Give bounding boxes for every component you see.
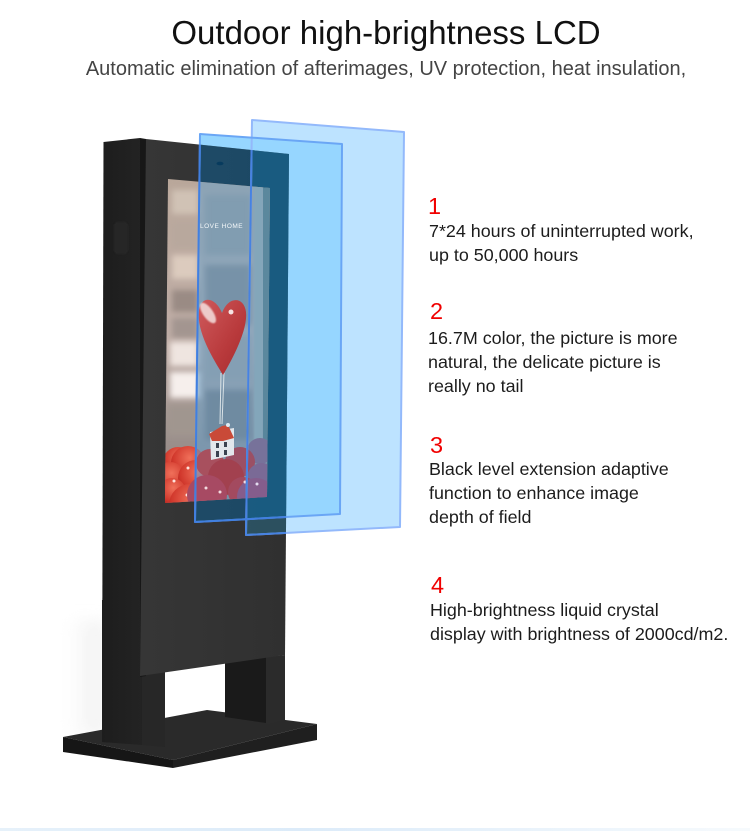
feature 2: really no tail	[428, 376, 523, 396]
feature 1: 7*24 hours of uninterrupted work,	[429, 221, 694, 241]
camera hole	[216, 162, 224, 165]
feature 2: natural, the delicate picture is	[428, 352, 661, 372]
rear blue film panel, over white	[246, 120, 404, 535]
feature 3: function to enhance image	[429, 483, 639, 503]
slogan: LOVE HOME	[200, 223, 243, 230]
feature 4: 4	[431, 572, 444, 598]
film tint over screen	[196, 182, 270, 502]
right edge of screen through films	[263, 188, 270, 440]
feature 3: Black level extension adaptive	[429, 459, 669, 479]
heart highlights	[199, 302, 217, 324]
screen image	[165, 179, 270, 503]
feature 3: depth of field	[429, 507, 531, 527]
outdoor LCD kiosk	[63, 138, 317, 768]
balloon strings	[220, 373, 224, 424]
rear film outline	[246, 120, 404, 535]
feature 3	[429, 432, 669, 527]
feature 1	[428, 193, 694, 265]
feature 3: 3	[430, 432, 443, 458]
tinted balloons	[187, 438, 268, 502]
blurred brick wall	[168, 190, 251, 440]
wall shadow	[66, 620, 104, 735]
front film tint	[196, 144, 289, 521]
right leg	[225, 655, 285, 725]
bottom strip	[0, 828, 750, 831]
feature 4	[430, 572, 728, 644]
feature 1: 1	[428, 193, 441, 219]
film outlines where they cross the kiosk	[194, 144, 286, 536]
grey pillar	[254, 185, 263, 455]
subtitle: Automatic elimination of afterimages, UV protection, heat insulation,	[86, 58, 686, 80]
front blue film panel, over white	[195, 134, 342, 522]
red balloons, left	[165, 446, 210, 503]
rear film tint	[247, 150, 289, 534]
feature 4: High-brightness liquid crystal	[430, 600, 659, 620]
side wall	[102, 138, 142, 745]
heart balloon	[199, 300, 246, 375]
front film outline	[195, 134, 342, 522]
front panel	[140, 139, 289, 676]
left leg	[102, 600, 165, 747]
house	[209, 423, 234, 460]
corner strip	[140, 138, 146, 677]
feature 2: 16.7M color, the picture is more	[428, 328, 678, 348]
base plate	[63, 710, 317, 768]
feature 2: 2	[430, 298, 443, 324]
title: Outdoor high-brightness LCD	[171, 14, 601, 51]
feature 1: up to 50,000 hours	[429, 245, 578, 265]
feature 4: display with brightness of 2000cd/m2.	[430, 624, 728, 644]
feature 2	[428, 298, 678, 396]
film tints on bezel	[196, 144, 289, 534]
side vent	[114, 222, 128, 254]
